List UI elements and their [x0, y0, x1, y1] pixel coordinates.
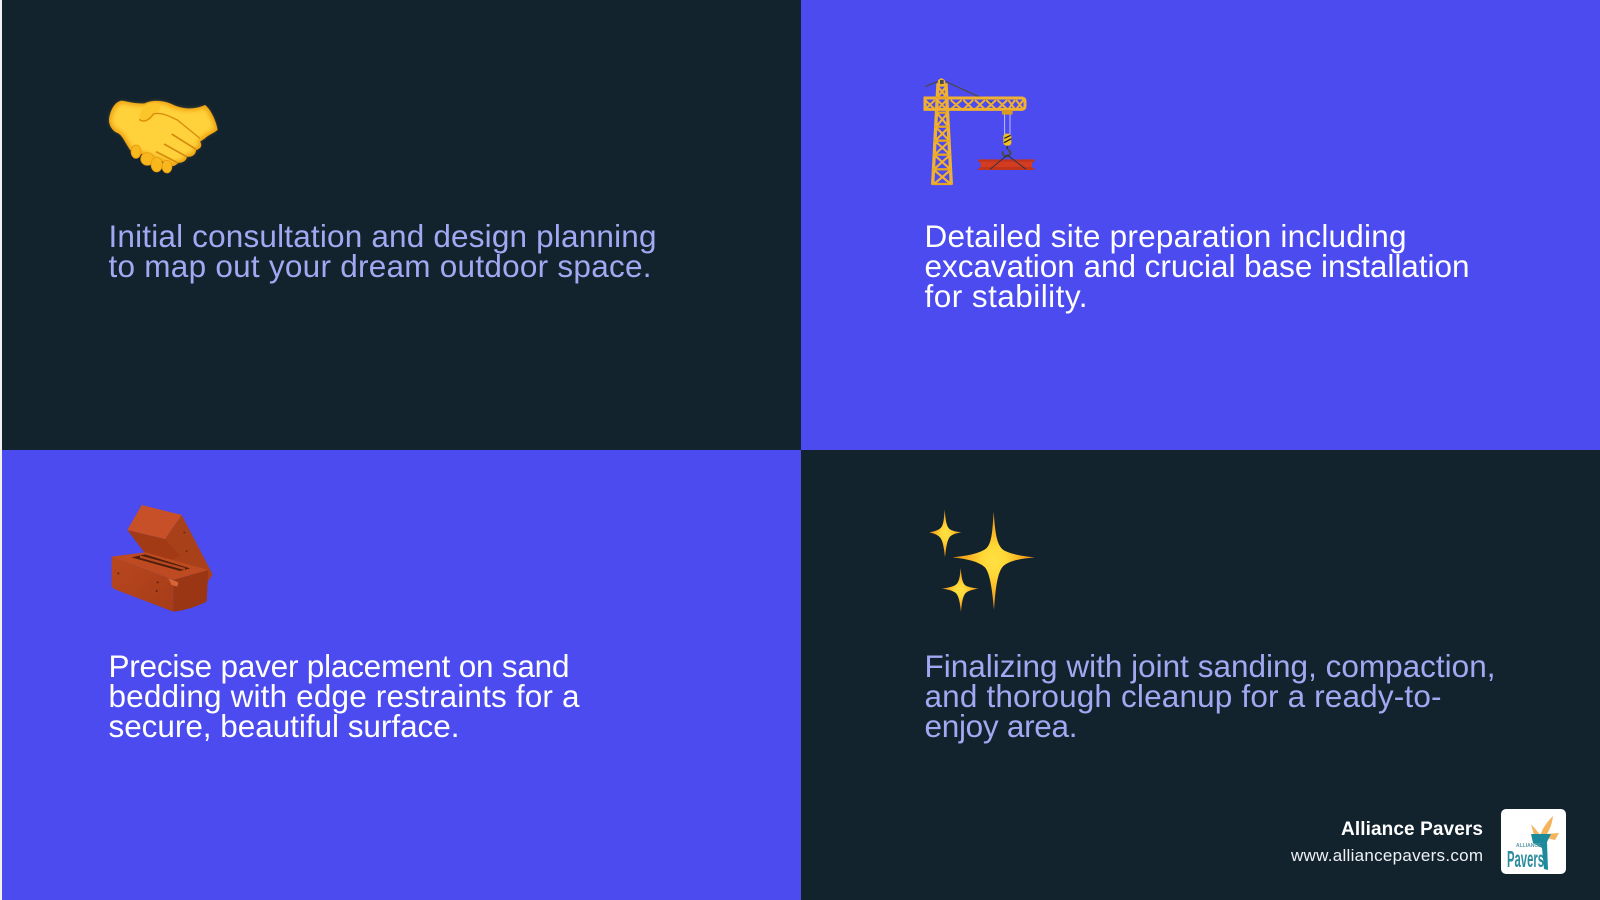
- text: paver placement: bedding with edge restraints for a: [108, 678, 580, 714]
- icon: handshake: [109, 101, 218, 173]
- text: paver placement: secure, beautiful surface.: [108, 708, 460, 744]
- panel: finishing: [801, 450, 1600, 900]
- logo: ALLIANCE: [1516, 843, 1542, 849]
- text: consultation: Initial consultation and design planning: [108, 218, 656, 254]
- text: site preparation: for stability.: [924, 278, 1088, 314]
- icon: bricks: [112, 505, 213, 612]
- brand name: Alliance Pavers: [1341, 819, 1483, 840]
- icon: sparkles: [929, 509, 1035, 612]
- left edge sliver: [0, 0, 2, 900]
- text: paver placement: Precise paver placement on sand: [108, 648, 570, 684]
- icon: construction crane: [925, 78, 1035, 185]
- text: finishing: enjoy area.: [924, 708, 1078, 744]
- logo: [1501, 809, 1566, 874]
- panel: paver placement: [2, 450, 801, 900]
- logo: Pavers: [1507, 846, 1544, 872]
- text: site preparation: Detailed site preparation including: [924, 218, 1406, 254]
- text: finishing: and thorough cleanup for a ready-to-: [924, 678, 1442, 714]
- panel: consultation: [2, 0, 801, 450]
- brand: Alliance Pavers: [1290, 809, 1566, 874]
- text: consultation: to map out your dream outdoor space.: [108, 248, 652, 284]
- text: finishing: Finalizing with joint sanding, compaction,: [924, 648, 1496, 684]
- panel: site preparation: [801, 0, 1600, 450]
- text: site preparation: excavation and crucial base installation: [924, 248, 1470, 284]
- website: www.alliancepavers.com: [1290, 846, 1483, 865]
